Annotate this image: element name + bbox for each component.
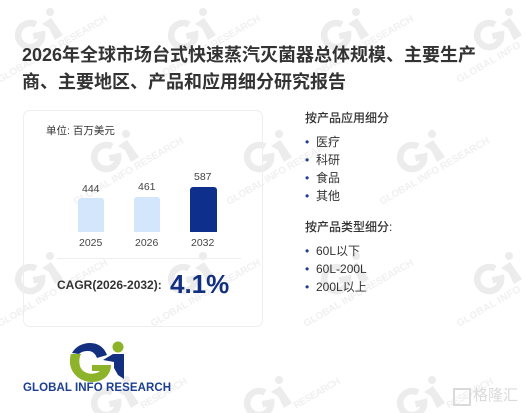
year 2025: 2025: [79, 237, 102, 249]
divider: [57, 258, 241, 259]
heading: type: 按产品类型细分:: [305, 220, 392, 234]
panel: market size chart: [23, 110, 263, 327]
brand name: 格隆汇: [473, 387, 518, 404]
title: 商、主要地区、产品和应用细分研究报告: [22, 72, 346, 92]
value 2032: 587: [194, 171, 212, 183]
CAGR label: CAGR(2026-2032):: [57, 278, 162, 292]
items: application: 食品: [316, 171, 340, 185]
bar 2025: [78, 198, 104, 232]
watermark pattern: GLOBAL INFO RESEARCH: [225, 136, 339, 208]
value 2026: 461: [138, 181, 156, 193]
bar 2032: [190, 187, 217, 232]
items: application: •: [305, 189, 309, 203]
items: application: •: [305, 171, 309, 185]
watermark pattern: GLOBAL INFO RESEARCH: [378, 136, 492, 208]
watermark pattern: GLOBAL INFO RESEARCH: [149, 14, 263, 86]
items: type: •: [305, 280, 309, 294]
logo mark: [70, 342, 124, 382]
items: type: [305, 244, 367, 294]
items: application: 医疗: [316, 135, 340, 149]
watermark pattern: GLOBAL INFO: [455, 284, 523, 330]
list: by application: [305, 111, 389, 203]
brand icon: [453, 388, 471, 406]
items: type: •: [305, 262, 309, 276]
items: type: 200L以上: [316, 280, 367, 294]
year 2032: 2032: [191, 237, 214, 249]
logo text: GLOBAL INFO RESEARCH: [23, 382, 171, 394]
watermark pattern: GLOBAL INFO RESEARCH: [72, 136, 186, 208]
items: application: •: [305, 153, 309, 167]
title: [22, 45, 476, 92]
watermark pattern: RESEARCH: [292, 376, 343, 412]
logo: Global Info Research: [23, 342, 171, 394]
items: type: 60L以下: [316, 244, 360, 258]
items: type: •: [305, 244, 309, 258]
title: 2026年全球市场台式快速蒸汽灭菌器总体规模、主要生产: [22, 45, 476, 65]
unit label: 单位: 百万美元: [46, 125, 115, 137]
items: application: [305, 135, 340, 203]
watermark pattern: RESEARCH: [139, 376, 190, 412]
year 2026: 2026: [135, 237, 158, 249]
items: type: 60L-200L: [316, 262, 367, 276]
brand mark: bottom right: [453, 387, 518, 406]
heading: application: 按产品应用细分: [305, 111, 389, 125]
items: application: •: [305, 135, 309, 149]
items: application: 科研: [316, 153, 340, 167]
watermark pattern: GLOBAL INFO RESEARCH: [149, 258, 263, 330]
watermark pattern: RESEARCH: [445, 376, 496, 412]
items: application: 其他: [316, 189, 340, 203]
list: by type: [305, 220, 392, 294]
bar 2026: [134, 197, 160, 232]
watermark pattern: GLOBAL INFO: [455, 40, 523, 86]
CAGR value: 4.1%: [170, 269, 229, 299]
value 2025: 444: [82, 183, 100, 195]
watermark pattern: GLOBAL INFO RESEARCH: [302, 258, 416, 330]
watermark pattern: GLOBAL INFO RESEARCH: [302, 14, 416, 86]
